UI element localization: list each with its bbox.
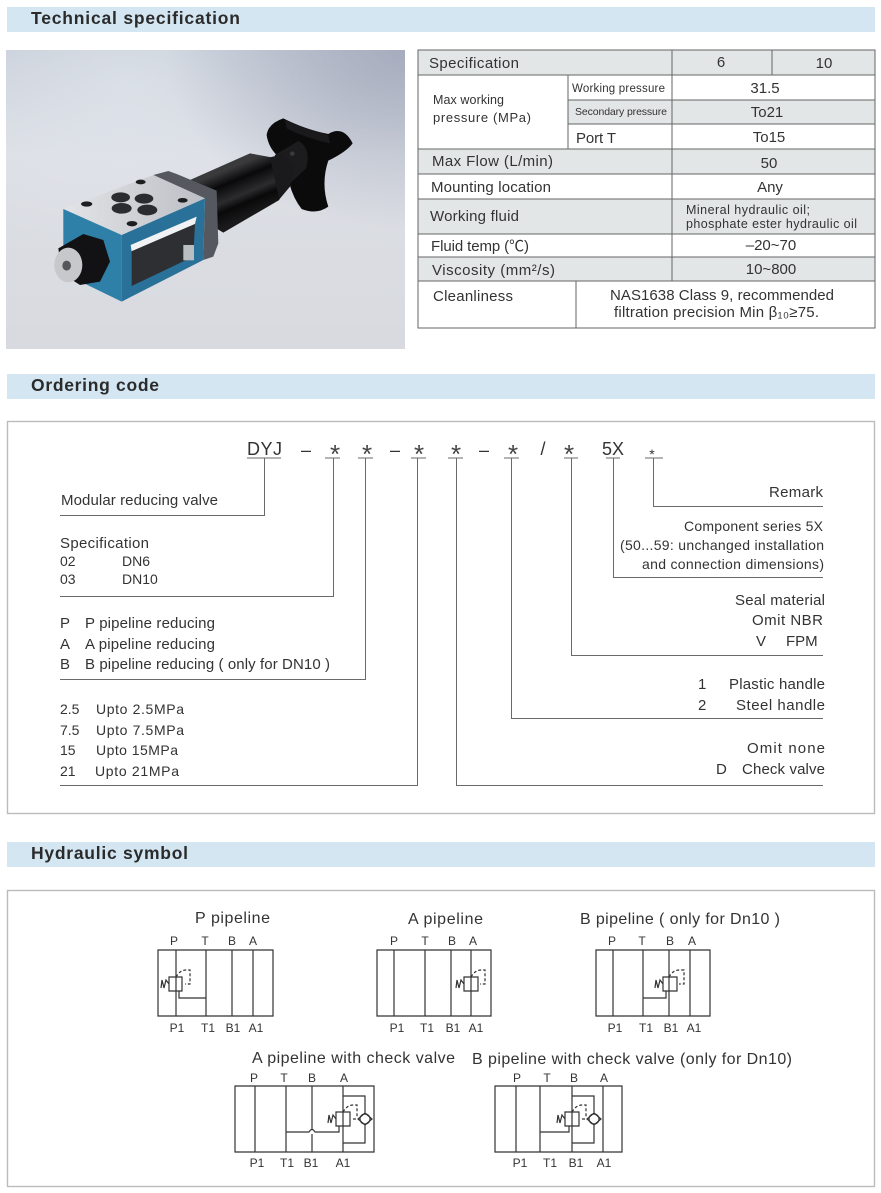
- symbol: B pipeline: P1: [608, 1021, 623, 1035]
- leader lines: [60, 458, 823, 786]
- row: max working pressure: pressure (MPa): [433, 110, 531, 125]
- model code string: /: [540, 439, 546, 459]
- symbol: B pipeline with check valve: A1: [597, 1156, 612, 1170]
- text: handle options: Plastic handle: [729, 676, 825, 693]
- text: component series: (50...59: unchanged installation: [620, 537, 824, 553]
- text: handle options: 2: [698, 697, 706, 714]
- row: max flow: Max Flow (L/min): [432, 153, 553, 170]
- row: cleanliness: NAS1638 Class 9, recommended: [610, 287, 834, 304]
- symbol: A pipeline with check valve: P1: [250, 1156, 265, 1170]
- symbol: P pipeline: B: [228, 934, 236, 948]
- icon: handle knob: [267, 118, 353, 211]
- model code string: [247, 439, 655, 469]
- text: pipeline options: B: [60, 656, 70, 673]
- symbol: A pipeline: T1: [420, 1021, 434, 1035]
- symbol: B pipeline with check valve: B pipeline with check valve (only for Dn10): [472, 1051, 792, 1068]
- symbol: A pipeline: P1: [390, 1021, 405, 1035]
- row: working fluid: Working fluid: [430, 208, 519, 225]
- symbol: B pipeline: B1: [664, 1021, 679, 1035]
- symbol: P pipeline: A1: [249, 1021, 264, 1035]
- model code string: *: [330, 439, 340, 469]
- icon: name plate: [131, 217, 197, 286]
- row: max working pressure: Secondary pressure: [575, 106, 667, 118]
- icon: blue block: [63, 198, 205, 302]
- model code string: –: [390, 440, 400, 460]
- symbol: A pipeline with check valve: B1: [304, 1156, 319, 1170]
- symbol: B pipeline with check valve: T: [543, 1071, 551, 1085]
- product photo: modular reducing valve: [6, 50, 405, 349]
- symbol: B pipeline: A: [688, 934, 696, 948]
- symbol: B pipeline with check valve: [472, 1051, 792, 1170]
- row: working fluid: phosphate ester hydraulic oil: [686, 217, 857, 231]
- row: specification: 6: [717, 54, 725, 71]
- symbol: A pipeline with check valve: [235, 1050, 455, 1170]
- text: specification options: DN6: [122, 553, 150, 569]
- text: specification options: Specification: [60, 535, 149, 552]
- icon: silver top face with ports: [63, 175, 205, 235]
- row: max working pressure: [433, 80, 785, 147]
- text: seal material: V: [756, 633, 766, 650]
- text: component series: [620, 518, 824, 572]
- text: seal material: [735, 592, 825, 650]
- symbol: B pipeline with check valve: B: [570, 1071, 578, 1085]
- symbol: P pipeline: P pipeline: [195, 910, 270, 927]
- heading: Technical specification: Technical specification: [31, 8, 240, 28]
- symbol: B pipeline: [580, 911, 780, 1035]
- icon: dark end plate: [153, 171, 218, 260]
- row: mounting location: Mounting location: [431, 179, 551, 196]
- row: mounting location: Any: [757, 179, 783, 196]
- text: pipeline options: A pipeline reducing: [85, 636, 215, 653]
- text: handle options: 1: [698, 676, 706, 693]
- text: component series: Component series 5X: [684, 518, 824, 534]
- symbol: P pipeline: T1: [201, 1021, 215, 1035]
- symbol: B pipeline with check valve: T1: [543, 1156, 557, 1170]
- heading: Technical specification: [7, 7, 875, 32]
- text: handle options: Steel handle: [736, 697, 825, 714]
- row: max flow: 50: [761, 155, 777, 172]
- model code string: *: [649, 446, 655, 462]
- row: working fluid: [430, 203, 857, 231]
- symbol: B pipeline: B pipeline ( only for Dn10 ): [580, 911, 780, 928]
- table: technical specification: [418, 50, 875, 328]
- panel: ordering code: [8, 422, 874, 814]
- model code string: *: [414, 439, 424, 469]
- text: pressure options: Upto 2.5MPa: [96, 701, 184, 717]
- text: check valve options: [716, 740, 825, 778]
- model code string: *: [508, 439, 518, 469]
- symbol: B pipeline: T1: [639, 1021, 653, 1035]
- symbol: P pipeline: B1: [226, 1021, 241, 1035]
- text: pressure options: Upto 7.5MPa: [96, 722, 184, 738]
- symbol: A pipeline: A1: [469, 1021, 484, 1035]
- symbol: A pipeline: A pipeline: [408, 911, 483, 928]
- symbol: A pipeline with check valve: T1: [280, 1156, 294, 1170]
- model code string: *: [564, 439, 574, 469]
- symbol: A pipeline: B: [448, 934, 456, 948]
- icon: hex nut and plug: [54, 234, 110, 285]
- symbol: B pipeline with check valve: A: [600, 1071, 608, 1085]
- row: viscosity: 10~800: [746, 261, 796, 278]
- row: specification: Specification: [429, 55, 519, 72]
- row: mounting location: [431, 179, 783, 196]
- model code string: 5X: [602, 439, 624, 459]
- model code string: –: [301, 440, 311, 460]
- text: seal material: FPM: [786, 633, 818, 650]
- row: cleanliness: Cleanliness: [433, 288, 513, 305]
- symbol: A pipeline: P: [390, 934, 398, 948]
- row: max working pressure: Port T: [576, 130, 616, 147]
- row: viscosity: [432, 261, 796, 279]
- heading: Hydraulic symbol: Hydraulic symbol: [31, 843, 188, 863]
- text: pipeline options: B pipeline reducing ( only for DN10 ): [85, 656, 330, 673]
- heading: Ordering code: [7, 374, 875, 399]
- symbol: B pipeline with check valve: P1: [513, 1156, 528, 1170]
- model code string: *: [362, 439, 372, 469]
- symbol: A pipeline with check valve: T: [280, 1071, 288, 1085]
- model code string: DYJ: [247, 439, 282, 459]
- text: pressure options: 21: [60, 763, 76, 779]
- text: remark: Remark: [769, 484, 824, 501]
- symbol: B pipeline with check valve: P: [513, 1071, 521, 1085]
- text: pressure options: 2.5: [60, 701, 80, 717]
- text: pressure options: Upto 15MPa: [96, 742, 178, 758]
- model code string: *: [451, 439, 461, 469]
- symbol: P pipeline: T: [201, 934, 209, 948]
- text: specification options: DN10: [122, 571, 158, 587]
- symbol: B pipeline: A1: [687, 1021, 702, 1035]
- text: check valve options: Omit none: [747, 740, 825, 757]
- row: max working pressure: To15: [753, 129, 785, 146]
- symbol: A pipeline with check valve: B: [308, 1071, 316, 1085]
- symbol: P pipeline: [158, 910, 273, 1035]
- text: check valve options: Check valve: [742, 761, 825, 778]
- symbol: B pipeline: B: [666, 934, 674, 948]
- symbol: A pipeline: B1: [446, 1021, 461, 1035]
- row: fluid temp: Fluid temp (℃): [431, 238, 529, 255]
- symbol: A pipeline: [377, 911, 491, 1035]
- symbol: P pipeline: A: [249, 934, 257, 948]
- row: fluid temp: [431, 237, 796, 255]
- text: specification options: 02: [60, 553, 76, 569]
- text: seal material: Omit NBR: [752, 612, 823, 629]
- text: pipeline options: P: [60, 615, 70, 632]
- model code string: –: [479, 440, 489, 460]
- text: handle options: [698, 676, 825, 714]
- symbol: B pipeline: T: [638, 934, 646, 948]
- text: pressure options: 7.5: [60, 722, 80, 738]
- text: component series: and connection dimensions): [642, 556, 824, 572]
- row: viscosity: Viscosity (mm²/s): [432, 262, 555, 279]
- symbol: P pipeline: P1: [170, 1021, 185, 1035]
- row: max working pressure: 31.5: [750, 80, 780, 97]
- text: check valve options: D: [716, 761, 727, 778]
- text: pipeline options: [60, 615, 330, 673]
- heading: Hydraulic symbol: [7, 842, 875, 867]
- row: working fluid: Mineral hydraulic oil;: [686, 203, 810, 217]
- symbol: B pipeline: P: [608, 934, 616, 948]
- row: max working pressure: Max working: [433, 93, 504, 107]
- text: modular reducing valve: Modular reducing valve: [61, 492, 218, 509]
- row: max working pressure: To21: [751, 104, 783, 121]
- row: specification: 10: [816, 55, 832, 72]
- symbol: A pipeline with check valve: P: [250, 1071, 258, 1085]
- text: pressure options: 15: [60, 742, 76, 758]
- text: seal material: Seal material: [735, 592, 825, 609]
- text: pressure options: Upto 21MPa: [95, 763, 179, 779]
- symbol: A pipeline: A: [469, 934, 477, 948]
- icon: black cylinder: [190, 153, 295, 233]
- row: max flow: [432, 153, 777, 172]
- symbol: A pipeline with check valve: A pipeline with check valve: [252, 1050, 455, 1067]
- row: specification: [429, 54, 832, 72]
- heading: Ordering code: Ordering code: [31, 375, 159, 395]
- symbol: P pipeline: P: [170, 934, 178, 948]
- row: cleanliness: [433, 287, 834, 321]
- symbol: A pipeline: T: [421, 934, 429, 948]
- panel: hydraulic symbols: [8, 890, 874, 1186]
- text: specification options: [60, 535, 158, 587]
- row: cleanliness: filtration precision Min β₁₀≥75.: [614, 304, 819, 321]
- row: fluid temp: –20~70: [746, 237, 796, 254]
- symbol: A pipeline with check valve: A1: [336, 1156, 351, 1170]
- text: pipeline options: A: [60, 636, 70, 653]
- symbol: A pipeline with check valve: A: [340, 1071, 348, 1085]
- text: pipeline options: P pipeline reducing: [85, 615, 215, 632]
- text: pressure options: [60, 701, 184, 779]
- symbol: B pipeline with check valve: B1: [569, 1156, 584, 1170]
- text: specification options: 03: [60, 571, 76, 587]
- shaded rows: [418, 50, 875, 281]
- row: max working pressure: Working pressure: [572, 83, 665, 95]
